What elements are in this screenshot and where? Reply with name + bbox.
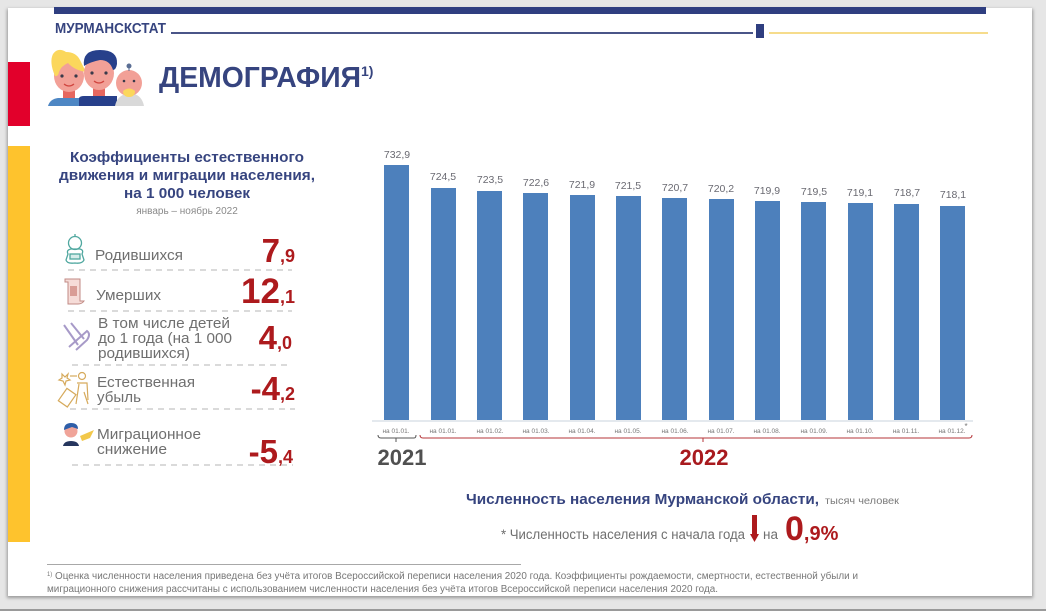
row: migration decrease: -5,4 (249, 433, 293, 470)
header marker (756, 24, 764, 38)
bracket: 2022 (420, 435, 972, 442)
row: infants: родившихся) (98, 345, 190, 362)
callout: change since start of year: * Численность населения с начала года (501, 527, 745, 542)
panel: rates heading: движения и миграции населения, (59, 168, 315, 184)
arrow: down (750, 515, 759, 542)
bar chart: population: на 01.05. (614, 428, 642, 435)
panel: rates heading: январь – ноябрь 2022 (136, 205, 238, 217)
row: births (66, 232, 295, 269)
callout: change since start of year (501, 510, 839, 548)
chart caption unit: тысяч человек (825, 495, 899, 507)
footnote rule (47, 564, 521, 565)
bar chart: population: на 01.02. (476, 428, 504, 435)
bar chart: population: на 01.12. (938, 428, 966, 435)
header rule: blue (171, 32, 753, 34)
chart caption: Численность населения Мурманской области, (466, 491, 819, 508)
bar chart: population: на 01.06. (661, 428, 689, 435)
bar chart: population: 723,5 (477, 174, 503, 186)
bar chart: population: 718,7 (894, 187, 920, 199)
footnote: 1) (47, 572, 52, 578)
bar chart: population: 719,9 (754, 185, 780, 197)
bar chart: population: 722,6 (523, 177, 549, 189)
bar chart: population: на 01.01. (382, 428, 410, 435)
row: migration decrease: Миграционное (97, 426, 201, 443)
panel: rates heading: Коэффициенты естественного (70, 150, 304, 166)
row: natural decrease (58, 370, 295, 407)
top bar (54, 7, 986, 14)
footnote (47, 570, 858, 595)
bar chart: population: 720,7 (662, 182, 688, 194)
callout: change since start of year: на (763, 527, 778, 542)
title footnote mark: 1) (361, 63, 373, 79)
header: organisation name: МУРМАНСКСТАТ (55, 21, 166, 37)
bar chart: population: на 01.09. (800, 428, 828, 435)
bar chart: population: * (964, 422, 968, 431)
bar chart: population: 732,9 (384, 149, 410, 161)
bar chart: population: на 01.10. (846, 428, 874, 435)
bar chart: population: 721,9 (569, 179, 595, 191)
row: deaths: Умерших (96, 287, 162, 304)
row: natural decrease: Естественная (97, 374, 195, 391)
bar chart: population: 720,2 (708, 183, 734, 195)
bar chart: population: на 01.11. (893, 428, 919, 435)
bar chart: population: 718,1 (940, 189, 966, 201)
row: deaths: 12,1 (241, 272, 295, 311)
bracket: 2021 (378, 435, 416, 442)
icon: traveller (58, 372, 88, 407)
header rule: yellow (769, 32, 988, 34)
label: 2022: 2022 (680, 445, 728, 470)
callout: change since start of year: 0,9% (785, 510, 839, 548)
bar chart: population: на 01.04. (568, 428, 596, 435)
row: infants: 4,0 (259, 319, 292, 356)
footnote: миграционного снижения рассчитаны с использованием численности населения без учёта итогов Всероссийской переписи населения 2020 года. (47, 583, 718, 595)
bar chart: population: на 01.08. (753, 428, 781, 435)
panel: rates heading (59, 150, 315, 217)
title: ДЕМОГРАФИЯ (159, 62, 361, 94)
row: migration decrease (63, 423, 293, 470)
row: births: 7,9 (262, 232, 295, 269)
row: natural decrease: -4,2 (251, 370, 295, 407)
icon: swaddle (64, 323, 89, 350)
row: natural decrease: убыль (97, 389, 141, 406)
bar chart: population (372, 149, 973, 435)
icon: scroll (65, 279, 84, 304)
bar chart: population: 719,1 (847, 187, 873, 199)
bar chart: population: 721,5 (615, 180, 641, 192)
icon: baby (66, 234, 84, 263)
label: 2021: 2021 (378, 445, 426, 470)
side bar: yellow (8, 146, 30, 542)
row: infants: В том числе детей (98, 315, 230, 332)
footnote: Оценка численности населения приведена без учёта итогов Всероссийской переписи населения 2020 года. Коэффициенты рождаемости, смертности, естественной убыли и (52, 570, 858, 582)
row: infants: до 1 года (на 1 000 (98, 330, 232, 347)
row: deaths (65, 272, 295, 311)
panel: rates heading: на 1 000 человек (124, 186, 251, 202)
row: births: Родившихся (95, 247, 183, 264)
row: migration decrease: снижение (97, 441, 167, 458)
side bar: red (8, 62, 30, 126)
icon: family (48, 50, 144, 106)
row: infants (64, 315, 292, 362)
bar chart: population: 719,5 (801, 186, 827, 198)
bar chart: population: на 01.03. (522, 428, 550, 435)
bar chart: population: 724,5 (430, 171, 456, 183)
bar chart: population: на 01.01. (429, 428, 457, 435)
icon: person (63, 423, 94, 446)
bar chart: population: на 01.07. (707, 428, 735, 435)
